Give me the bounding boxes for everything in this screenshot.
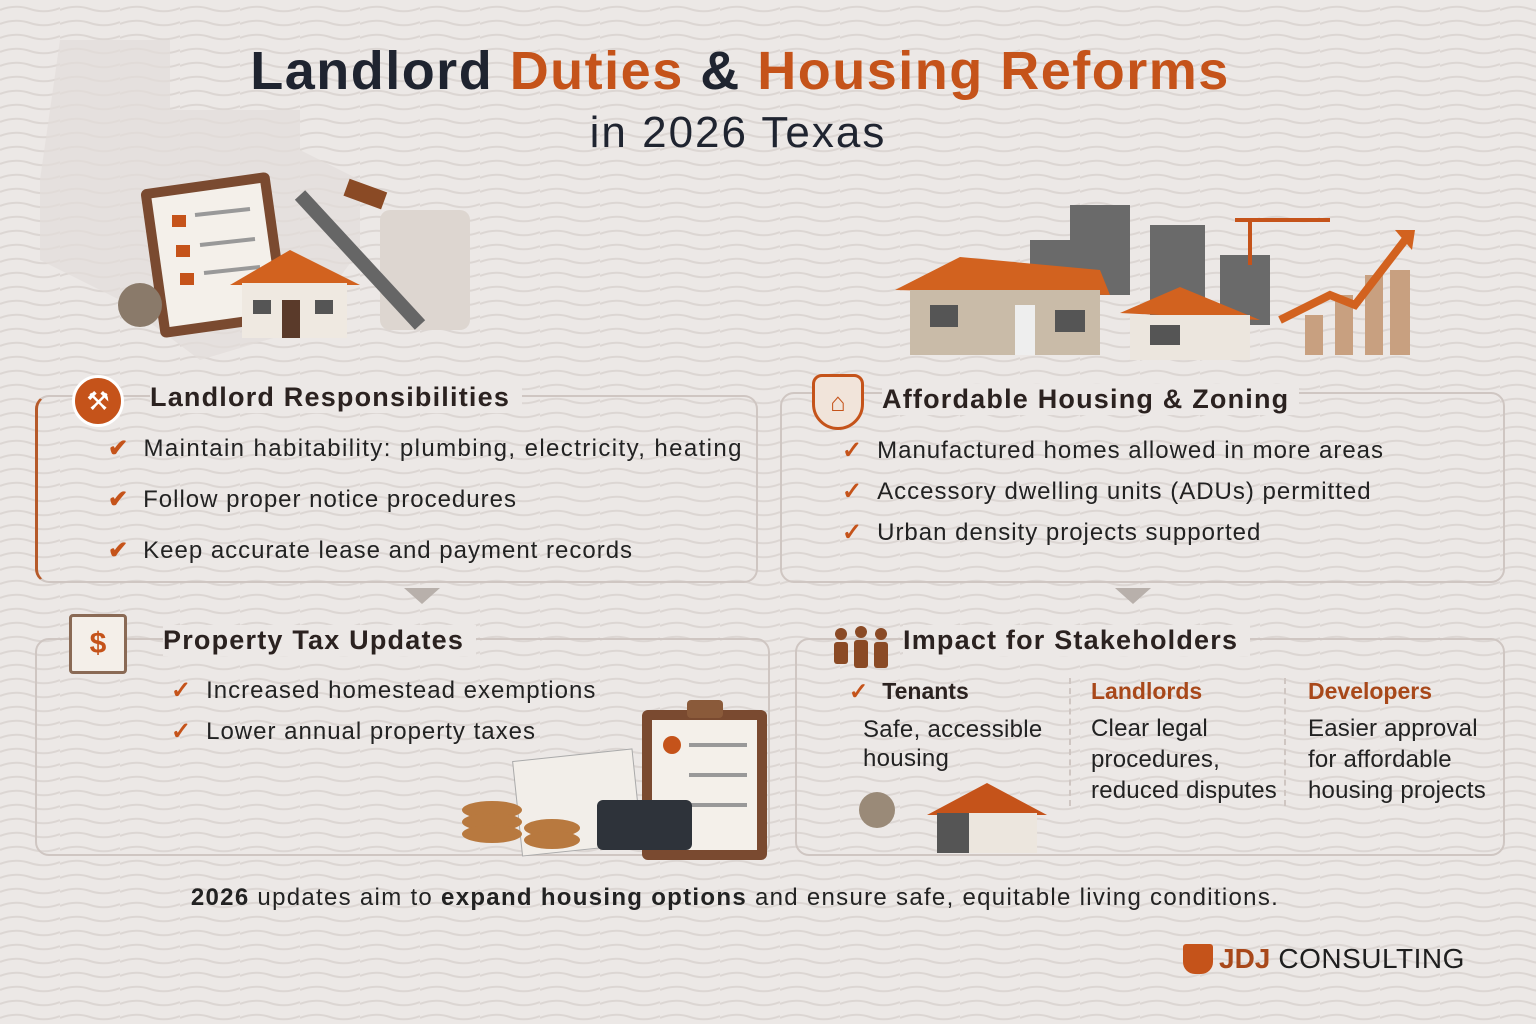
list: ✔ Keep accurate lease and payment records: [108, 537, 633, 564]
subtitle: in 2026 Texas: [590, 108, 886, 157]
list: [171, 677, 596, 745]
list: ✔ Follow proper notice procedures: [108, 486, 517, 513]
logo: JDJ Consulting: [1183, 943, 1465, 974]
title: Landlord Duties & Housing Reforms: [250, 41, 1230, 101]
column: landlords: Landlords: [1091, 678, 1202, 704]
column: tenants: [849, 678, 1043, 772]
list: ✓ Increased homestead exemptions: [171, 677, 596, 704]
heading: Impact for Stakeholders: [903, 625, 1238, 655]
icon: house shield: [812, 374, 864, 430]
column: developers: Easier approval: [1308, 715, 1478, 742]
column: landlords: [1069, 678, 1284, 806]
list: ✓ Urban density projects supported: [842, 519, 1261, 546]
arrow: down left: [404, 588, 440, 604]
column: tenants: housing: [863, 745, 949, 772]
heading: Landlord Responsibilities: [150, 382, 510, 412]
illustration: city, homes and rising chart: [895, 205, 1415, 360]
icon: tools badge: [72, 375, 124, 427]
arrow: down right: [1115, 588, 1151, 604]
heading: Affordable Housing & Zoning: [882, 384, 1289, 414]
list: ✓ Manufactured homes allowed in more areas: [842, 437, 1384, 464]
column: developers: for affordable: [1308, 746, 1452, 773]
list: ✓ Lower annual property taxes: [171, 718, 536, 745]
panel: impact for stakeholders: [795, 638, 1505, 856]
footer statement: 2026 updates aim to expand housing options and ensure safe, equitable living conditions.: [191, 884, 1279, 911]
illustration: small house: [859, 783, 1047, 853]
panel: property tax updates: [35, 638, 770, 856]
illustration: clipboard, tools and house: [118, 172, 470, 338]
list: [108, 435, 743, 564]
illustration: papers, coins, calculator, clipboard: [462, 700, 767, 860]
panel: affordable housing & zoning: [780, 392, 1505, 583]
panel: landlord responsibilities: [35, 395, 758, 583]
column: tenants: Safe, accessible: [863, 716, 1043, 743]
logo: JDJ Consulting: JDJ: [1219, 943, 1270, 974]
column: tenants: ✓ Tenants: [849, 678, 969, 704]
icon: house shield: ⌂: [830, 387, 846, 417]
list: ✔ Maintain habitability: plumbing, electricity, heating: [108, 435, 743, 462]
list: [842, 437, 1384, 546]
column: developers: Developers: [1308, 678, 1432, 704]
logo: JDJ Consulting: CONSULTING: [1278, 943, 1465, 974]
icon: tools badge: ⚒: [86, 386, 110, 416]
list: ✓ Accessory dwelling units (ADUs) permitted: [842, 478, 1372, 505]
column: developers: housing projects: [1308, 777, 1486, 804]
heading: Property Tax Updates: [163, 625, 464, 655]
icon: people: [834, 626, 888, 668]
column: landlords: procedures,: [1091, 746, 1220, 773]
column: landlords: Clear legal: [1091, 715, 1208, 742]
column: landlords: reduced disputes: [1091, 777, 1277, 804]
column: developers: [1284, 678, 1499, 806]
icon: tax document: [69, 614, 127, 674]
icon: tax document: $: [90, 627, 106, 660]
